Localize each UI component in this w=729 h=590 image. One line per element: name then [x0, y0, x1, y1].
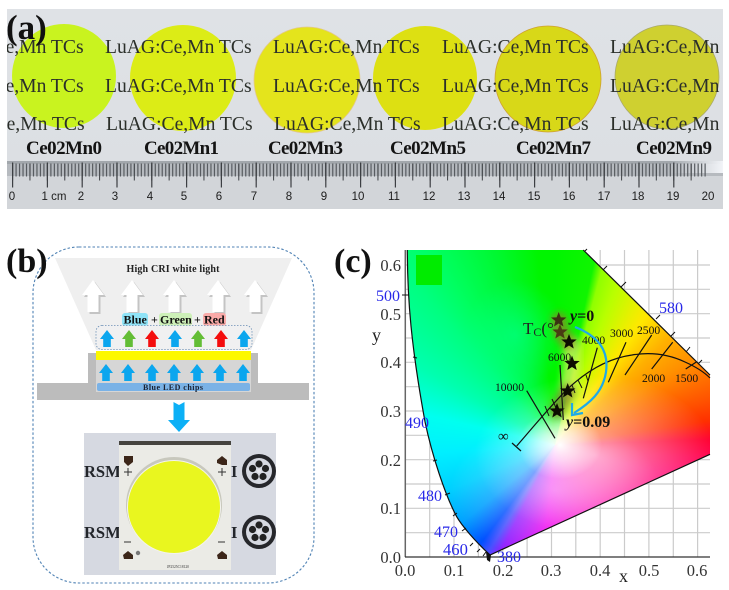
- photo background text: RSM: [84, 523, 121, 542]
- background text rows: LuAG:Ce,Mn: [610, 37, 720, 58]
- ruler: 14: [493, 191, 506, 203]
- large blue down arrow: [168, 402, 190, 432]
- background text rows: LuAG:Ce,Mn: [610, 114, 720, 135]
- wavelength labels: 460: [443, 540, 468, 559]
- sample disc Ce02Mn1: [130, 25, 236, 131]
- x axis labels: [395, 561, 707, 580]
- x axis labels: 0.0: [395, 561, 415, 580]
- axis titles: x: [619, 566, 628, 586]
- background text rows: LuAG:Ce,Mn TCs: [106, 114, 253, 135]
- ruler: 20: [702, 191, 714, 203]
- corner pads and polarity marks: [123, 456, 227, 559]
- text: Tc( axis annotation: (°: [541, 319, 554, 338]
- heading: panel label (a): (a): [6, 8, 47, 47]
- background text rows: LuAG:Ce,Mn TCs: [273, 76, 420, 97]
- ruler: 18: [632, 191, 644, 203]
- colour temperature labels: 6000: [548, 351, 571, 364]
- y axis labels: 0.1: [380, 499, 401, 518]
- violet end cluster: [486, 552, 491, 562]
- sample name labels: Ce02Mn9: [636, 138, 712, 159]
- wavelength labels: 380: [497, 549, 521, 566]
- yellow phosphor disc: [128, 461, 220, 553]
- background text rows: [0, 37, 720, 135]
- colour temperature labels: [495, 324, 698, 445]
- background text rows: LuAG:Ce,Mn TCs: [442, 37, 589, 58]
- wavelength labels: 470: [434, 524, 458, 541]
- sample disc Ce02Mn9: [615, 25, 719, 129]
- ruler: 0: [9, 191, 15, 203]
- gamut outline: [407, 250, 710, 555]
- text: High CRI white light: High CRI white light: [126, 264, 220, 275]
- ruler: 5: [181, 191, 187, 203]
- ruler: 4: [147, 191, 154, 203]
- ruler: 12: [423, 191, 435, 203]
- photo background text: RSM: [84, 462, 121, 481]
- photo background text: I: [231, 462, 237, 481]
- ruler: 9: [321, 191, 327, 203]
- Planckian locus with end cap: [517, 354, 710, 446]
- wavelength labels: 480: [418, 488, 442, 505]
- ruler: 3: [112, 191, 118, 203]
- ruler: 11: [388, 191, 400, 203]
- LED photo: [84, 433, 276, 575]
- colour temperature labels: 10000: [495, 381, 524, 394]
- text: Tc( axis annotation: T: [523, 319, 533, 338]
- sample disc Ce02Mn7: [495, 26, 601, 132]
- emitted blue, green, red arrows: [100, 330, 251, 347]
- Blue LED chips bar: [97, 383, 250, 392]
- blue excitation arrows: [99, 364, 250, 381]
- sample name labels: Ce02Mn5: [390, 138, 466, 159]
- y axis labels: [380, 256, 401, 567]
- colour temperature labels: 2000: [642, 372, 665, 385]
- ruler: 13: [458, 191, 470, 203]
- wavelength labels: 500: [376, 288, 400, 305]
- logo stamps: [242, 454, 276, 549]
- blue trend arrow: [572, 327, 606, 415]
- sample disc Ce02Mn0: [12, 24, 116, 128]
- ruler: 19: [667, 191, 679, 203]
- boundary wavelength ticks: [402, 249, 702, 556]
- text: Blue + Green + Red: +: [194, 312, 201, 326]
- x axis labels: 0.1: [444, 561, 464, 580]
- chart overlay: [372, 248, 710, 586]
- sample name labels: [26, 138, 712, 159]
- colour temperature labels: 3000: [610, 327, 633, 340]
- heading: panel label (b): (b): [6, 243, 48, 280]
- photo background text: I: [231, 523, 237, 542]
- y axis labels: 0.3: [380, 402, 401, 421]
- colour temperature labels: ∞: [498, 429, 509, 445]
- y axis labels: 0.4: [380, 353, 401, 372]
- dotted box around emitted colours: [96, 326, 252, 350]
- axis titles: y: [372, 325, 381, 345]
- minor isotherm ticks: [545, 375, 588, 416]
- background text rows: LuAG:Ce,Mn TCs: [105, 37, 252, 58]
- background text rows: LuAG:Ce,Mn TCs: [442, 76, 589, 97]
- x axis labels: 0.2: [493, 561, 513, 580]
- x axis labels: 0.6: [687, 561, 707, 580]
- COB substrate: [119, 441, 231, 570]
- isotherm lines: [512, 335, 697, 451]
- panel: (c) CIE chromaticity diagram: [372, 248, 710, 586]
- text: Blue + Green + Red: Green: [160, 312, 192, 326]
- glow behind sample stars: [557, 320, 572, 411]
- sample disc Ce02Mn3: [254, 27, 360, 133]
- y axis labels: 0.6: [380, 256, 401, 275]
- background text rows: LuAG:Ce,Mn TCs: [274, 114, 421, 135]
- background text rows: LuAG:Ce,Mn TCs: [273, 37, 420, 58]
- chromaticity gamut colours: [405, 250, 710, 557]
- text: Blue + Green + Red: Red: [204, 312, 225, 326]
- background text rows: LuAG:Ce,Mn: [610, 76, 720, 97]
- ruler: 1 cm: [42, 191, 66, 203]
- sample stars: [549, 312, 580, 418]
- ruler: 15: [528, 191, 540, 203]
- sample name labels: Ce02Mn7: [516, 138, 592, 159]
- photo background text: [84, 462, 237, 542]
- LED photo: JP2525C18120: [167, 565, 189, 569]
- sample disc Ce02Mn5: [373, 26, 477, 130]
- heading: panel label (c): (c): [334, 243, 372, 280]
- dashed rounded frame: [33, 247, 314, 583]
- chart grid: [406, 250, 710, 556]
- white light cone: [55, 258, 292, 350]
- ruler: 10: [352, 191, 364, 203]
- panel: (b) device schematic and LED photo: [32, 246, 315, 584]
- ruler: 7: [251, 191, 257, 203]
- ruler: [7, 161, 723, 209]
- colour temperature labels: 2500: [637, 324, 660, 337]
- colour temperature labels: 1500: [675, 372, 698, 385]
- y axis labels: 0.0: [380, 548, 401, 567]
- background text rows: LuAG:Ce,Mn TCs: [105, 76, 252, 97]
- x axis labels: 0.3: [541, 561, 561, 580]
- background text rows: LuAG:Ce,Mn TCs: [442, 114, 589, 135]
- text: y=0.09: y=0.09: [564, 414, 610, 431]
- ruler: 2: [78, 191, 84, 203]
- x axis labels: 0.4: [590, 561, 610, 580]
- text: Blue + Green + Red: Blue: [124, 312, 148, 326]
- ruler: 17: [598, 191, 610, 203]
- x axis labels: 0.5: [639, 561, 659, 580]
- green legend square: [416, 255, 442, 285]
- sample name labels: Ce02Mn1: [144, 138, 219, 159]
- y axis labels: 0.5: [380, 305, 401, 324]
- text: y=0: y=0: [568, 308, 594, 325]
- colour temperature labels: 4000: [582, 334, 605, 347]
- wavelength labels: 490: [405, 415, 429, 432]
- ruler: 16: [563, 191, 575, 203]
- axis titles: [372, 325, 628, 586]
- Blue LED chips bar: Blue LED chips: [143, 383, 203, 392]
- sample name labels: Ce02Mn0: [26, 138, 102, 159]
- ruler: 6: [216, 191, 222, 203]
- yellow ceramic layer: [96, 351, 251, 360]
- text: Blue + Green + Red: +: [151, 312, 158, 326]
- text: Tc( axis annotation: C: [533, 325, 541, 339]
- axes: [404, 250, 406, 557]
- panel: (a) photo of ceramic samples with ruler: [7, 9, 723, 209]
- wavelength labels: [376, 288, 683, 566]
- LED package housing: [37, 353, 309, 400]
- ruler: 8: [286, 191, 292, 203]
- text: Blue + Green + Red: [122, 312, 226, 326]
- wavelength labels: 580: [659, 300, 683, 317]
- white output arrows: [82, 280, 268, 314]
- y axis labels: 0.2: [380, 451, 401, 470]
- sample name labels: Ce02Mn3: [268, 138, 343, 159]
